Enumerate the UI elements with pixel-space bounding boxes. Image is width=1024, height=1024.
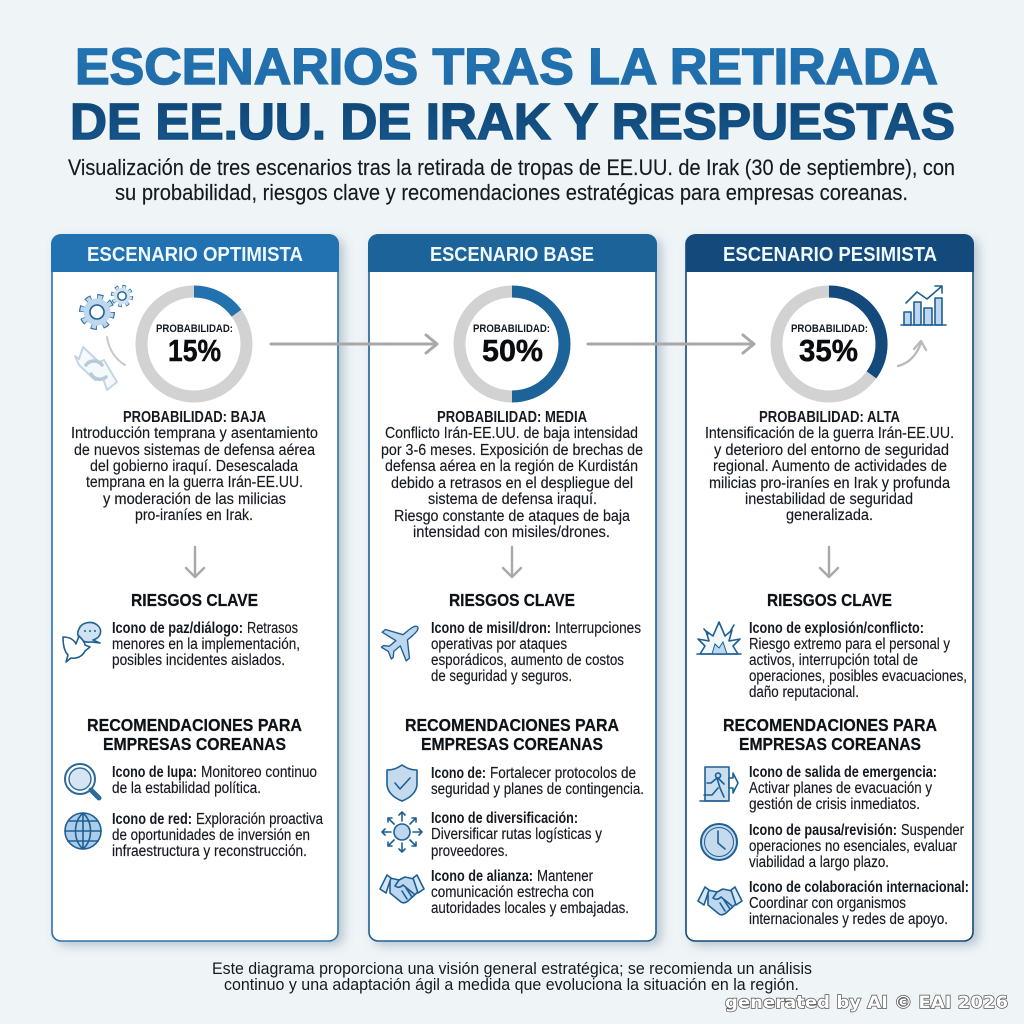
text: probabilidad alta: Intensificación de la guerra Irán-EE.UU. <box>705 425 954 442</box>
text: recomendacion red: infraestructura y reconstrucción. <box>112 843 307 860</box>
text: riesgo explosion: operaciones, posibles evacuaciones, <box>749 668 967 685</box>
icon: magnifier <box>65 764 99 798</box>
text: recomendacion lupa: Icono de lupa: <box>112 764 197 781</box>
panel: escenario base <box>368 234 657 941</box>
heading: riesgos clave: RIESGOS CLAVE <box>449 590 575 610</box>
text: probabilidad alta: y deterioro del entorno de seguridad <box>714 442 949 459</box>
arrow: base to pesimista <box>588 335 754 353</box>
text: probabilidad alta: PROBABILIDAD: ALTA <box>759 409 900 426</box>
heading: recomendaciones: RECOMENDACIONES PARA <box>87 715 302 735</box>
donut chart: 50% <box>460 292 564 396</box>
heading: riesgos clave: RIESGOS CLAVE <box>767 590 892 610</box>
footer note <box>212 960 812 994</box>
text: probabilidad baja: y moderación de las milicias <box>103 491 286 508</box>
text: probabilidad media: debido a retrasos en el despliegue del <box>391 475 633 492</box>
text: probabilidad alta: regional. Aumento de actividades de <box>713 458 947 475</box>
header: escenario base: ESCENARIO BASE <box>430 243 594 266</box>
text: recomendacion salida <box>749 764 937 813</box>
text: riesgo paz: posibles incidentes aislados. <box>112 652 285 669</box>
text: recomendacion colaboracion: Coordinar con organismos <box>749 895 906 912</box>
text: recomendacion red: de oportunidades de inversión en <box>112 827 310 844</box>
donut chart: 35%: 35% <box>799 333 858 368</box>
title <box>70 38 955 150</box>
text: recomendacion alianza: autoridades locales y embajadas. <box>431 900 629 917</box>
text: recomendacion escudo: seguridad y planes de contingencia. <box>431 781 644 798</box>
text: riesgo explosion: daño reputacional. <box>749 684 859 701</box>
footer note: Este diagrama proporciona una visión general estratégica; se recomienda un análisis <box>212 960 812 978</box>
header: escenario base <box>368 234 657 272</box>
text: recomendacion alianza: Mantener <box>537 868 593 885</box>
text: recomendacion escudo: Fortalecer protocolos de <box>490 765 636 782</box>
text: recomendacion alianza: Icono de alianza: <box>431 868 533 885</box>
icon: swap <box>75 337 125 390</box>
text: riesgo paz: Retrasos <box>247 620 298 637</box>
header: escenario pesimista: ESCENARIO PESIMISTA <box>723 243 937 266</box>
icon: globe <box>65 813 101 849</box>
text: recomendacion salida: Activar planes de evacuación y <box>749 780 932 797</box>
icon: plane <box>374 613 430 667</box>
text: probabilidad media: Riesgo constante de ataques de baja <box>394 508 630 525</box>
text: riesgo misil: de seguridad y seguros. <box>431 668 572 685</box>
text: riesgo explosion <box>749 620 967 701</box>
text: probabilidad alta <box>705 409 954 524</box>
donut chart: 35% <box>776 291 882 396</box>
text: probabilidad baja: Introducción temprana y asentamiento <box>71 425 318 442</box>
text: recomendacion alianza <box>431 868 629 917</box>
text: recomendacion colaboracion: Icono de colaboración internacional: <box>749 879 969 896</box>
text: probabilidad alta: milicias pro-iraníes en Irak y profunda <box>709 475 950 492</box>
text: probabilidad baja: del gobierno iraquí. Desescalada <box>90 458 298 475</box>
icon: shield <box>387 765 417 801</box>
heading: recomendaciones: RECOMENDACIONES PARA <box>723 715 937 735</box>
text: probabilidad media: Conflicto Irán-EE.UU. de baja intensidad <box>385 425 638 442</box>
panel: escenario pesimista <box>686 234 974 941</box>
icon: peace dialogue <box>63 622 101 662</box>
text: recomendacion salida: gestión de crisis inmediatos. <box>749 796 920 813</box>
text: recomendacion lupa: de la estabilidad política. <box>112 780 261 797</box>
text: riesgo misil: operativas por ataques <box>431 636 567 653</box>
text: probabilidad media: por 3-6 meses. Exposición de brechas de <box>381 442 643 459</box>
text: recomendacion diversificacion: Diversificar rutas logísticas y <box>431 826 602 843</box>
text: recomendacion pausa: Suspender <box>901 822 964 839</box>
donut chart: 35%: PROBABILIDAD: <box>791 323 868 335</box>
header: escenario optimista: ESCENARIO OPTIMISTA <box>87 243 303 266</box>
heading: recomendaciones: EMPRESAS COREANAS <box>739 734 921 754</box>
text: probabilidad alta: inestabilidad de seguridad <box>745 491 913 508</box>
text: recomendacion colaboracion <box>749 879 969 928</box>
arrow: down <box>186 547 204 577</box>
text: probabilidad media: intensidad con misiles/drones. <box>413 524 610 541</box>
heading: recomendaciones: RECOMENDACIONES PARA <box>405 715 619 735</box>
text: probabilidad media: defensa aérea en la región de Kurdistán <box>385 458 638 475</box>
text: riesgo paz: Icono de paz/diálogo: <box>112 620 243 637</box>
text: riesgo explosion: Icono de explosión/conflicto: <box>749 620 924 637</box>
text: recomendacion salida: Icono de salida de emergencia: <box>749 764 937 781</box>
title: ESCENARIOS TRAS LA RETIRADA <box>75 38 938 95</box>
text: riesgo misil: Interrupciones <box>555 620 641 637</box>
icon: handshake <box>380 875 424 903</box>
arrow: down <box>820 547 838 577</box>
text: riesgo paz: menores en la implementación, <box>112 636 300 653</box>
subtitle: Visualización de tres escenarios tras la retirada de tropas de EE.UU. de Irak (30 de septiembre), con <box>68 155 955 180</box>
arrow: curved up <box>898 341 926 366</box>
text: probabilidad baja: pro-iraníes en Irak. <box>135 507 253 524</box>
text: recomendacion pausa: Icono de pausa/revisión: <box>749 822 897 839</box>
text: recomendacion escudo <box>431 765 644 798</box>
text: probabilidad baja <box>71 409 318 524</box>
arrow: down <box>503 547 521 577</box>
header: escenario optimista <box>51 234 339 272</box>
text: riesgo paz <box>112 620 300 669</box>
heading: recomendaciones: EMPRESAS COREANAS <box>103 734 286 754</box>
header: escenario pesimista <box>686 234 974 272</box>
text: recomendacion diversificacion <box>431 810 602 860</box>
text: probabilidad alta: generalizada. <box>786 507 873 524</box>
icon: handshake <box>698 887 742 915</box>
watermark: generated by AI © EAI 2026 <box>725 993 1008 1013</box>
heading: recomendaciones <box>87 715 302 754</box>
subtitle: su probabilidad, riesgos clave y recomendaciones estratégicas para empresas coreanas. <box>115 180 908 205</box>
text: recomendacion red: Exploración proactiva <box>196 811 323 828</box>
subtitle <box>68 155 955 205</box>
heading: recomendaciones: EMPRESAS COREANAS <box>421 734 603 754</box>
icon: emergency exit <box>700 767 738 801</box>
text: riesgo misil: Icono de misil/dron: <box>431 620 551 637</box>
arrow: optimista to base <box>271 335 437 353</box>
text: riesgo misil: esporádicos, aumento de costos <box>431 652 624 669</box>
text: probabilidad media: PROBABILIDAD: MEDIA <box>437 409 587 426</box>
text: recomendacion lupa: Monitoreo continuo <box>201 764 317 781</box>
footer note: continuo y una adaptación ágil a medida que evoluciona la situación en la región. <box>224 976 799 994</box>
text: probabilidad baja: de nuevos sistemas de defensa aérea <box>74 442 315 459</box>
text: recomendacion pausa: operaciones no esenciales, evaluar <box>749 838 957 855</box>
donut chart: 15% <box>142 291 246 396</box>
icon: clock <box>701 824 737 860</box>
text: recomendacion pausa <box>749 822 964 871</box>
text: riesgo misil <box>431 620 641 685</box>
donut chart: 15%: 15% <box>168 333 221 368</box>
text: recomendacion pausa: viabilidad a largo plazo. <box>749 854 889 871</box>
text: recomendacion diversificacion: Icono de diversificación: <box>431 810 578 827</box>
heading: recomendaciones <box>723 715 937 754</box>
text: recomendacion red <box>112 811 323 860</box>
text: probabilidad baja: temprana en la guerra Irán-EE.UU. <box>86 474 303 491</box>
icon: explosion <box>697 622 741 654</box>
text: recomendacion escudo: Icono de: <box>431 765 486 782</box>
text: probabilidad media <box>381 409 643 541</box>
title: DE EE.UU. DE IRAK Y RESPUESTAS <box>70 93 955 150</box>
text: recomendacion colaboracion: internacionales y redes de apoyo. <box>749 911 948 928</box>
donut chart: 15%: PROBABILIDAD: <box>156 323 233 335</box>
text: probabilidad media: sistema de defensa iraquí. <box>428 491 597 508</box>
donut chart: 50%: PROBABILIDAD: <box>473 323 550 335</box>
text: probabilidad baja: PROBABILIDAD: BAJA <box>123 409 266 426</box>
text: recomendacion lupa <box>112 764 317 797</box>
icon: diversification <box>382 812 422 852</box>
donut chart: 50%: 50% <box>482 333 543 368</box>
text: recomendacion red: Icono de red: <box>112 811 192 828</box>
icon: rising bar chart <box>901 286 946 325</box>
text: riesgo explosion: Riesgo extremo para el personal y <box>749 636 950 653</box>
heading: recomendaciones <box>405 715 619 754</box>
text: riesgo explosion: activos, interrupción total de <box>749 652 918 669</box>
panel: escenario optimista <box>51 234 339 941</box>
text: recomendacion alianza: comunicación estrecha con <box>431 884 594 901</box>
text: recomendacion diversificacion: proveedores. <box>431 843 508 860</box>
heading: riesgos clave: RIESGOS CLAVE <box>131 590 258 610</box>
icon: gears <box>82 287 131 327</box>
